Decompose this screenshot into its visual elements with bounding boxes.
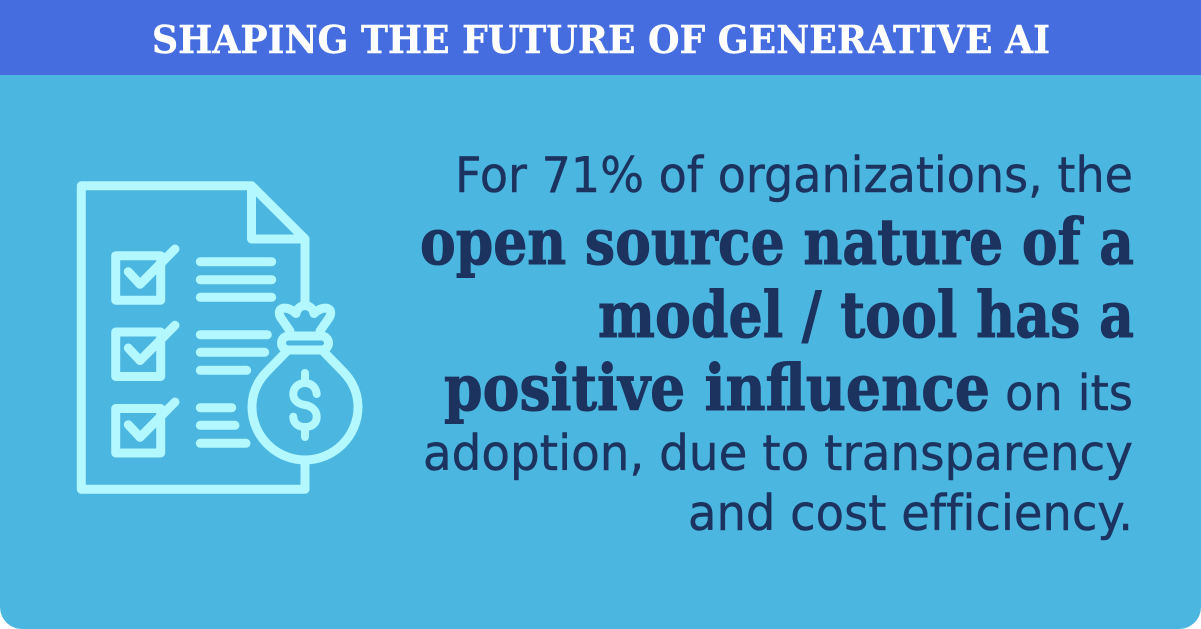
money bag crown (279, 306, 331, 331)
line 4 end: on its (1005, 365, 1133, 422)
dollar sign (293, 373, 317, 437)
line 4 emphasis: positive influence (444, 351, 990, 426)
line 1: For 71% of organizations, the (455, 147, 1133, 204)
checkbox 2 (116, 325, 175, 376)
icon: checklist document with money bag (81, 186, 358, 489)
document outline (81, 186, 305, 489)
money bag body (252, 350, 358, 460)
document fold (252, 186, 305, 239)
line 6: and cost efficiency. (688, 485, 1133, 542)
title: SHAPING THE FUTURE OF GENERATIVE AI (152, 17, 1050, 62)
text lines 3 (200, 408, 246, 443)
text lines 1 (200, 262, 272, 297)
text lines 2 (200, 335, 267, 370)
checkbox 1 (116, 249, 175, 300)
text block: statistic (420, 147, 1134, 542)
line 5: adoption, due to transparency (423, 425, 1133, 482)
money bag tie (282, 336, 328, 350)
checkbox 3 (116, 402, 175, 453)
header bar (0, 0, 1201, 75)
